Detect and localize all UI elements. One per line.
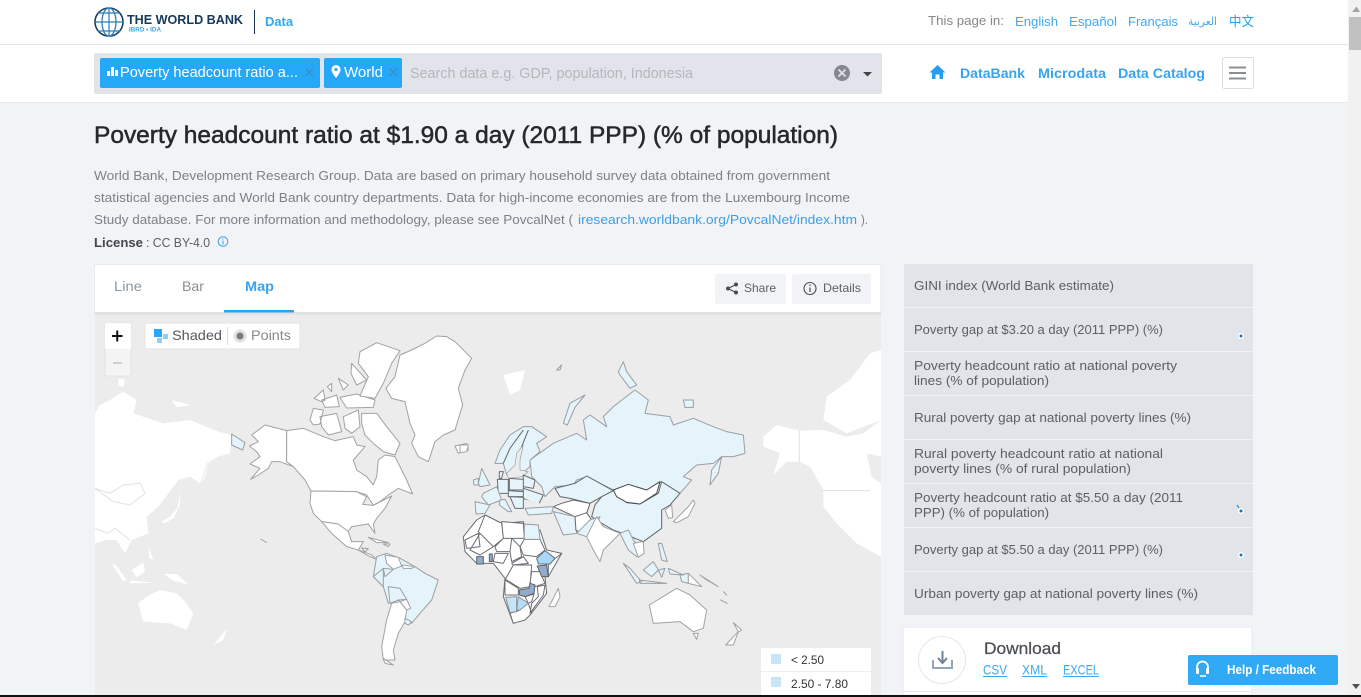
World Bank logo: THE WORLD BANK <box>127 13 243 27</box>
Indonesia and Philippines <box>623 543 688 583</box>
chip: indicator: Poverty headcount ratio a... <box>120 65 298 81</box>
top header bar <box>0 0 1348 45</box>
share button: Share <box>744 281 776 295</box>
description: statistical agencies and World Bank country departments. Data for high-income economies are from the Luxembourg Income <box>94 190 850 205</box>
help feedback button <box>1188 655 1338 685</box>
language links <box>928 11 1254 30</box>
Greenland <box>386 336 472 462</box>
language links: This page in: <box>928 13 1004 28</box>
nav links <box>960 65 1205 81</box>
download format links: CSV <box>983 662 1008 678</box>
world map <box>95 315 881 695</box>
navigation and search bar <box>0 45 1348 103</box>
Zambia <box>519 583 535 597</box>
panel: download <box>903 627 1252 695</box>
help feedback button: Help / Feedback <box>1227 662 1317 677</box>
search placeholder: Search data e.g. GDP, population, Indonesia <box>410 66 694 82</box>
Ellesmere <box>358 343 400 398</box>
panel: chart tabs: Map <box>245 278 274 294</box>
Scandinavia <box>495 427 547 477</box>
Iceland <box>455 443 468 453</box>
icon: menu <box>1222 58 1254 88</box>
Madagascar <box>549 588 560 607</box>
panel: related indicators: GINI index (World Bank estimate) <box>914 278 1114 293</box>
Southeast Asia <box>620 530 638 558</box>
nav links: Microdata <box>1038 65 1106 81</box>
Kenya <box>537 565 548 577</box>
panel: chart tabs <box>94 264 881 315</box>
map style toggle: Shaded <box>172 327 222 343</box>
description: ). <box>861 212 868 227</box>
eastern map section: Eurasia, Australia and wrapped Americas <box>503 350 881 645</box>
Novaya Zemlya <box>563 395 585 425</box>
World Bank logo <box>95 8 294 36</box>
chip: world <box>324 58 402 88</box>
Arctic islands <box>310 363 400 455</box>
Italy <box>499 499 512 512</box>
window bottom edge <box>0 695 1361 697</box>
Mongolia <box>613 482 660 504</box>
western map section: Pacific and Americas <box>95 336 472 665</box>
map legend: 2.50 - 7.80 <box>791 677 848 691</box>
Iceland <box>460 445 468 453</box>
share button <box>715 274 786 304</box>
language links: Español <box>1069 14 1117 29</box>
France <box>482 487 502 505</box>
Arctic Russian islands <box>557 362 693 407</box>
clear icon <box>834 65 850 81</box>
download format links: EXCEL <box>1063 662 1099 678</box>
Turkey <box>525 507 553 515</box>
icon: home <box>930 65 946 79</box>
language links: Français <box>1128 14 1178 29</box>
panel: related indicators: poverty lines (% of rural population) <box>914 461 1131 476</box>
wrapped Americas ghost <box>763 420 881 557</box>
dropdown caret <box>863 72 872 76</box>
chip: world: World <box>344 65 383 81</box>
Baltic Sea <box>507 445 528 478</box>
panel: chart tabs: Bar <box>182 278 204 294</box>
chip: indicator <box>100 58 320 88</box>
icon: download <box>918 636 966 684</box>
Alaska <box>249 425 293 479</box>
Papua New Guinea <box>688 573 702 587</box>
panel: related indicators: Rural poverty gap at national poverty lines (%) <box>914 410 1191 425</box>
Mexico <box>322 522 363 550</box>
panel: related indicators <box>904 264 1253 615</box>
Pakistan <box>577 517 600 537</box>
panel: related indicators: Urban poverty gap at national poverty lines (%) <box>914 586 1198 601</box>
Ghana and Togo <box>477 554 492 564</box>
map style toggle: Points <box>251 327 291 343</box>
panel: related indicators: Poverty gap at $5.50 a day (2011 PPP) (%) <box>914 542 1163 557</box>
nav links: DataBank <box>960 65 1025 81</box>
panel: related indicators: Poverty gap at $3.20 a day (2011 PPP) (%) <box>914 322 1163 337</box>
language links: 中文 <box>1229 11 1254 30</box>
panel: related indicators: Poverty headcount ratio at national poverty <box>914 358 1178 373</box>
description: iresearch.worldbank.org/PovcalNet/index.htm <box>578 212 857 227</box>
scrollbar <box>1348 0 1361 697</box>
Iran <box>553 512 577 535</box>
title: Poverty headcount ratio at $1.90 a day (2011 PPP) (% of population) <box>94 122 838 149</box>
description: World Bank, Development Research Group. Data are based on primary household survey data obtained from government <box>94 168 830 183</box>
description: Study database. For more information and methodology, please see PovcalNet ( <box>94 212 574 227</box>
map zoom control <box>105 323 131 376</box>
India <box>587 517 620 562</box>
map style toggle <box>145 323 300 349</box>
search box <box>94 53 882 94</box>
language links: العربية <box>1188 15 1217 28</box>
Australia <box>649 588 707 632</box>
New Zealand <box>726 623 742 645</box>
description <box>94 168 868 250</box>
Black Sea <box>525 499 540 506</box>
Central Asia <box>553 500 590 517</box>
Botswana <box>517 597 528 610</box>
Kazakhstan <box>555 476 613 503</box>
World Bank logo: Data <box>265 15 294 29</box>
icon: license info <box>218 237 228 246</box>
Namibia <box>506 597 517 613</box>
details button <box>792 274 871 304</box>
map legend <box>761 648 871 695</box>
Egypt <box>524 524 540 539</box>
panel: download: Download <box>984 639 1061 658</box>
Sakhalin <box>710 457 722 485</box>
Russia <box>530 390 745 497</box>
Canada <box>287 428 413 505</box>
map legend: < 2.50 <box>791 653 824 667</box>
details button: Details <box>823 281 861 295</box>
wrapped Asia ghost <box>95 392 232 553</box>
Afghanistan <box>575 513 592 532</box>
World Bank logo: IBRD • IDA <box>129 28 162 34</box>
language links: English <box>1015 14 1058 29</box>
Spain and Portugal <box>475 502 490 514</box>
download format links <box>983 662 1099 678</box>
map section: Europe and Africa <box>460 427 562 623</box>
description: : CC BY-4.0 <box>146 235 210 250</box>
panel: related indicators: lines (% of population) <box>914 373 1049 388</box>
United Kingdom and Ireland <box>473 468 490 487</box>
China <box>592 482 680 542</box>
Chukotka shaded <box>232 434 245 450</box>
panel: chart tabs: Line <box>114 278 142 294</box>
download format links: XML <box>1022 662 1047 678</box>
USA <box>310 491 392 533</box>
Korea and Japan <box>665 500 695 523</box>
panel: related indicators: Poverty headcount ratio at $5.50 a day (2011 <box>914 490 1183 505</box>
panel: related indicators: PPP) (% of population) <box>914 505 1049 520</box>
nav links: Data Catalog <box>1118 65 1205 81</box>
description: License <box>94 235 143 250</box>
Svalbard ghost <box>503 370 525 395</box>
Africa <box>463 515 562 623</box>
panel: related indicators: Rural poverty headcount ratio at national <box>914 446 1163 461</box>
Baltics and central Europe <box>497 472 543 508</box>
sparkline dots <box>1237 333 1244 558</box>
South America <box>373 553 438 623</box>
Ethiopia <box>537 551 555 564</box>
